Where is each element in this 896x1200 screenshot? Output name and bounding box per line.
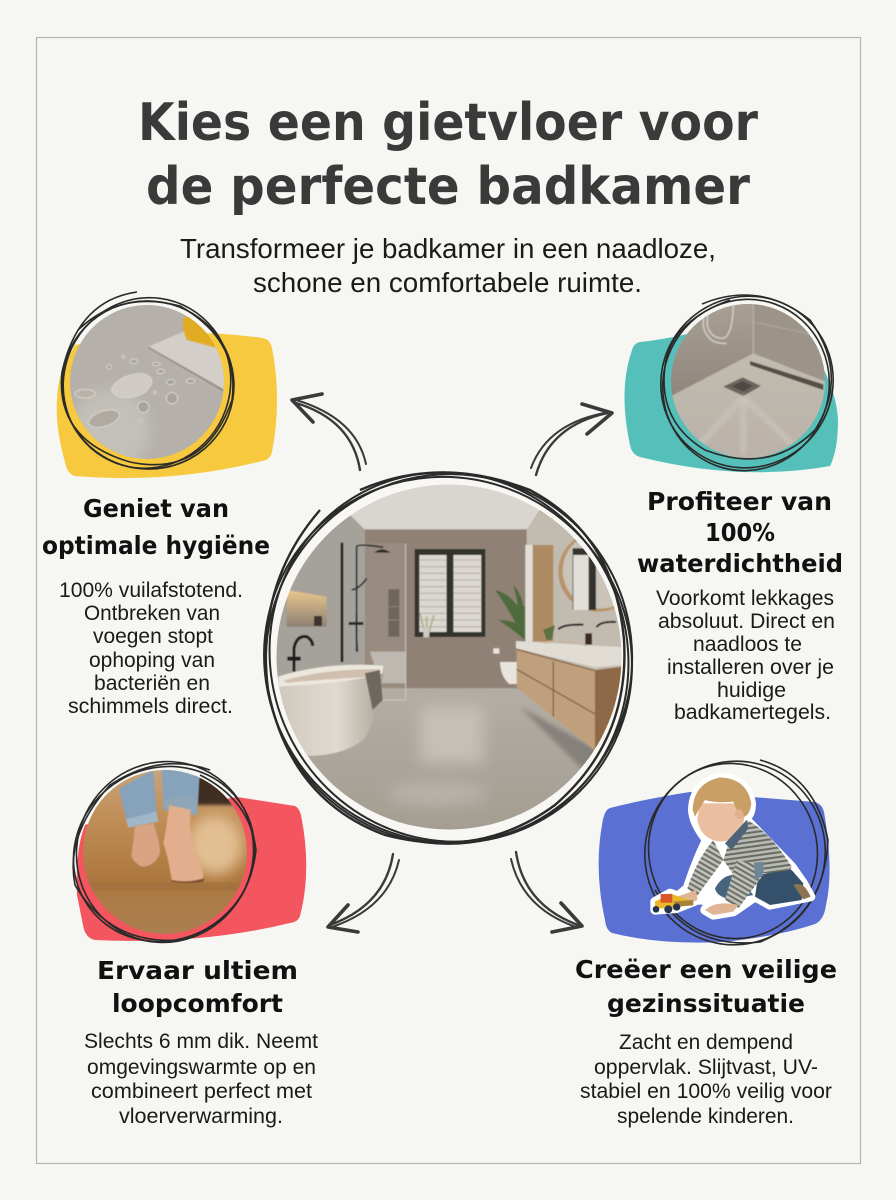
toy [655,893,693,908]
scribble rings [189,402,707,918]
hair [693,777,751,817]
subtitle: Transformeer je badkamer in een naadloze, [180,233,716,264]
far leg [715,875,753,899]
text: hygiene: voegen stopt [93,625,213,648]
white cutout outline [655,777,811,915]
text: family: oppervlak. Slijtvast, UV- [594,1056,818,1079]
far arm [687,840,723,897]
heading: family [575,955,837,1018]
feet [131,823,160,867]
title [138,93,758,217]
face [697,803,747,842]
photo: bare feet on wood [83,770,247,934]
photo: water droplets on floor [70,305,224,459]
text: waterproof: Voorkomt lekkages [656,587,834,610]
text: hygiene: 100% vuilafstotend. [59,579,243,602]
heading: waterproof: Profiteer van [647,487,832,516]
arrow: to waterproof [531,404,612,475]
bathtub [278,665,384,756]
shower [341,543,343,662]
teal blob [624,320,838,472]
text: family: Zacht en dempend [619,1031,793,1054]
hands [705,903,738,915]
text: comfort: combineert perfect met [91,1080,312,1103]
text: hygiene: Ontbreken van [84,602,220,625]
near arm [725,860,763,908]
heading: comfort [97,956,298,1018]
text: comfort: Slechts 6 mm dik. Neemt [84,1030,318,1053]
text: comfort: vloerverwarming. [119,1105,283,1128]
central photo: bathroom [263,471,634,845]
heading: hygiene [42,494,270,560]
subtitle [180,233,716,298]
heading: comfort: Ervaar ultiem [97,956,298,985]
heading: waterproof: waterdichtheid [637,549,843,578]
scribble circle [41,732,287,974]
window [415,549,485,637]
panel: comfort [72,760,306,944]
heading: family: gezinssituatie [607,989,805,1018]
arrow: to hygiene [292,394,366,470]
arrow: to comfort [328,854,399,932]
text: waterproof: badkamertegels. [674,701,831,724]
heading: waterproof: 100% [705,518,775,547]
text: hygiene [59,579,243,718]
text: comfort [84,1030,318,1128]
heading: waterproof [637,487,843,578]
cabinet [533,545,553,642]
image: toddler with toy [653,777,811,915]
text: hygiene: schimmels direct. [68,695,233,718]
text: hygiene: ophoping van [89,649,215,672]
taps [558,622,616,629]
red blob [77,797,306,941]
floor [375,688,556,725]
heading: family: Creëer een veilige [575,955,837,984]
plant [495,585,525,642]
scribble circle [32,267,262,499]
title: de perfecte badkamer [146,157,750,217]
text: waterproof [656,587,835,724]
text: waterproof: absoluut. Direct en [658,610,835,633]
scribble circle [626,261,868,503]
mirror [558,539,614,612]
text: waterproof: naadloos te [693,633,802,656]
text: hygiene: bacteriën en [94,672,210,695]
bathroom scene [276,484,622,830]
title: Kies een gietvloer voor [138,93,758,153]
blue blob [599,792,830,943]
sweater back [723,820,792,893]
heading: hygiene: Geniet van [83,494,229,523]
arrow: to family [511,852,582,932]
text: comfort: omgevingswarmte op en [87,1056,316,1079]
text: family: stabiel en 100% veilig voor [580,1080,832,1103]
toilet [500,662,518,684]
text: waterproof: huidige [717,679,786,702]
panel: waterproof [624,294,838,472]
scribble circle [619,736,851,970]
panel: family [599,736,851,970]
heading: hygiene: optimale hygiëne [42,531,270,560]
text: family [580,1031,832,1128]
shoe [793,884,811,899]
photo: shower floor drain [671,304,825,458]
near leg [755,870,803,905]
subtitle: schone en comfortabele ruimte. [253,267,642,298]
jeans [119,771,158,820]
panel: hygiene [56,291,277,478]
text: family: spelende kinderen. [617,1105,794,1128]
niche with light [287,590,327,627]
vanity [517,648,595,751]
text: waterproof: installeren over je [667,656,834,679]
heading: comfort: loopcomfort [112,989,283,1018]
yellow blob [57,333,277,478]
tub faucet [294,636,313,672]
